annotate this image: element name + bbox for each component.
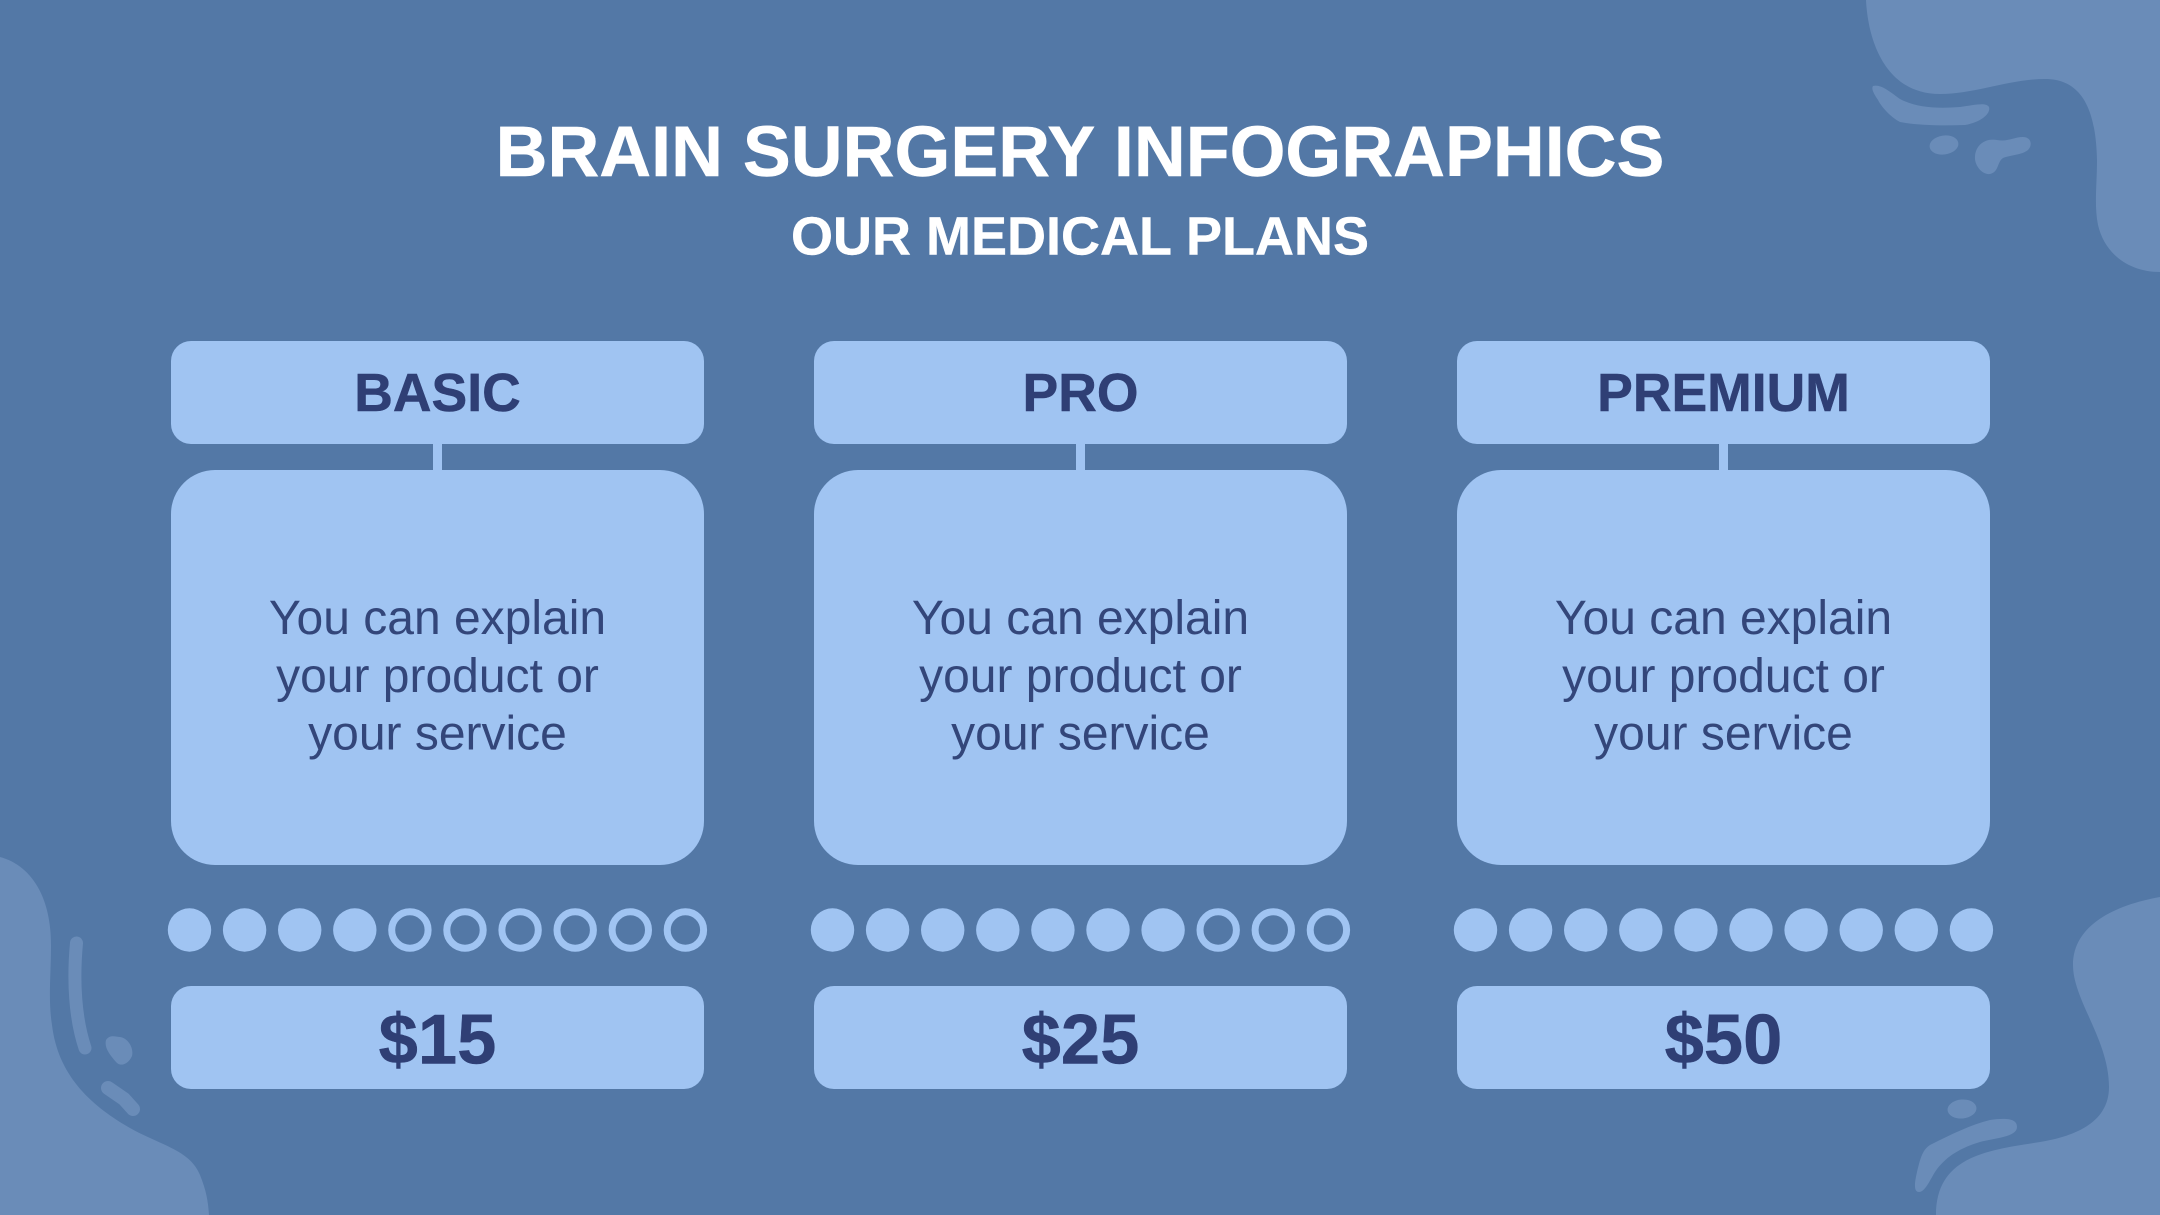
price: pro [814, 986, 1347, 1089]
plan header: premium: PREMIUM [1597, 364, 1850, 423]
description: premium [1457, 470, 1990, 865]
price: basic: $15 [379, 1000, 496, 1078]
rating dots: 4 of 10 [168, 908, 704, 952]
description: pro: your service [951, 708, 1210, 760]
plan header: basic [171, 341, 704, 444]
plan header: pro: PRO [1023, 364, 1138, 423]
description: premium: your product or [1562, 650, 1885, 703]
panel: basic plan [168, 341, 704, 1089]
description: basic [171, 470, 704, 865]
connector: pro [1076, 443, 1085, 471]
price: premium [1457, 986, 1990, 1089]
panel: premium plan [1454, 341, 1993, 1089]
description: pro [814, 470, 1347, 865]
rating dots: 10 of 10 [1454, 908, 1993, 952]
price: pro: $25 [1022, 1000, 1139, 1078]
panel: pro plan [811, 341, 1347, 1089]
decoration: bottom left blob [0, 857, 209, 1215]
description: pro: You can explain [912, 592, 1249, 645]
description: pro: your product or [919, 650, 1242, 703]
description: premium: your service [1594, 708, 1853, 760]
decoration: top right blob [1866, 0, 2160, 272]
plan header: basic: BASIC [354, 364, 521, 423]
description: basic: your product or [276, 650, 599, 703]
description: basic: You can explain [269, 592, 606, 645]
connector: premium [1719, 443, 1728, 471]
description: basic: your service [308, 708, 567, 760]
title: BRAIN SURGERY INFOGRAPHICS [496, 112, 1664, 192]
decoration: bottom right blob [1915, 897, 2160, 1215]
description: premium: You can explain [1555, 592, 1892, 645]
subtitle: OUR MEDICAL PLANS [791, 206, 1369, 266]
rating dots: 7 of 10 [811, 908, 1347, 952]
price: premium: $50 [1665, 1000, 1782, 1078]
connector: basic [433, 443, 442, 471]
plan header: pro [814, 341, 1347, 444]
price: basic [171, 986, 704, 1089]
plan header: premium [1457, 341, 1990, 444]
